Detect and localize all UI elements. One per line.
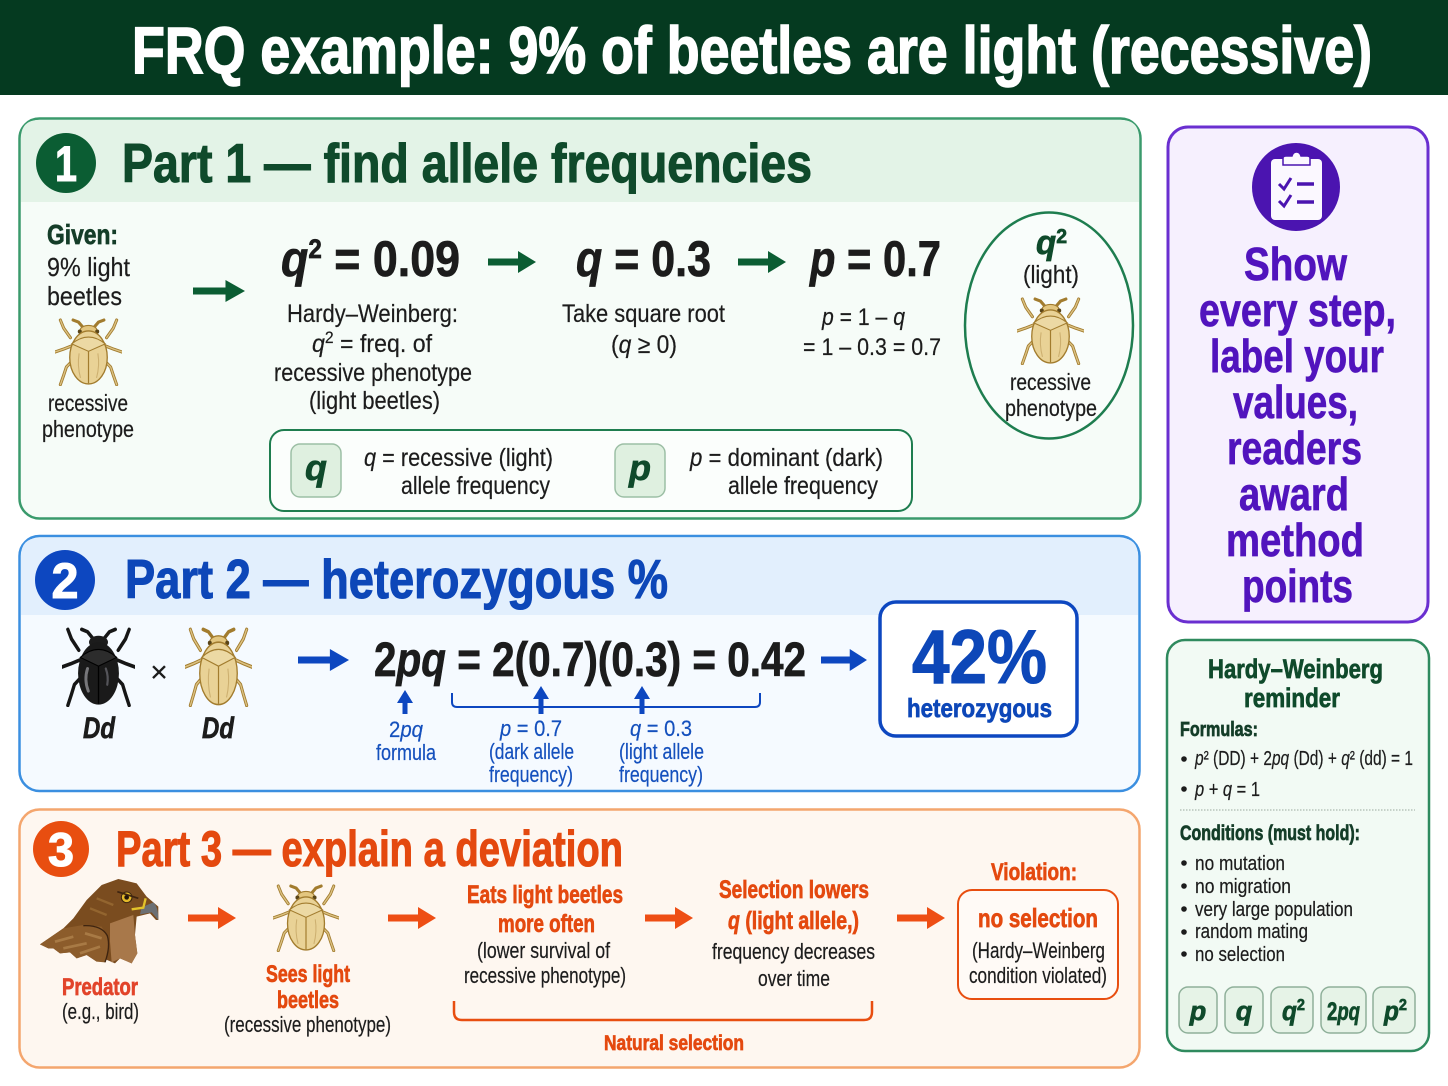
text: formulas: Formulas: [1180,719,1258,741]
text: q definition [364,444,553,500]
label: Dd light parent: Dd [202,712,235,745]
text: selection lowers q: over time [758,966,830,991]
arrow: q to p [738,251,786,273]
annotation: q value: frequency) [619,762,703,787]
annotation: p value [489,716,574,787]
tiles: symbols: 2 [1399,997,1407,1014]
text: show every step: method [1226,514,1364,566]
text: eats light beetles: Eats light beetles [467,881,623,909]
arrow: selection to violation [897,907,945,929]
key tile: q [291,444,341,497]
text: show every step: Show [1244,238,1347,290]
text: selection lowers q: Selection lowers [719,876,869,904]
annotation: q value: q = 0.3 [630,716,692,741]
text: show every step: points [1242,560,1353,612]
text: predator: Predator [62,974,138,1001]
callout: q squared light phenotype: phenotype [1005,395,1097,421]
text: sees light beetles [224,961,391,1037]
arrow: beetle to eats [388,907,436,929]
text: p derivation [803,304,941,361]
text: selection lowers q: frequency decreases [712,939,875,964]
callout: 42 percent heterozygous: heterozygous [907,693,1052,723]
text: recessive phenotype: recessive [48,390,128,416]
callout: no selection: condition violated) [969,963,1107,988]
text: take square root: (q ≥ 0) [611,331,677,359]
text: sees light beetles: Sees light [266,961,350,988]
callout: q squared light phenotype: 2 [1056,226,1067,248]
text: recessive phenotype [42,390,134,442]
text: eats light beetles: more often [498,910,595,938]
tiles: symbols: 2pq [1327,998,1360,1026]
annotation: 2pq formula: formula [376,740,437,765]
equation: q squared: 2 [308,234,322,264]
annotation: p value: (dark allele [489,739,574,764]
arrow: q squared to q [488,251,536,273]
text: eats light beetles: recessive phenotype) [464,963,626,988]
text: take square root [562,300,725,359]
text: formulas: p² (DD) + 2pq (Dd) + q² (dd) = 1 [1194,748,1413,770]
arrow: predator to beetle [188,907,236,929]
text: conditions: no selection [1195,944,1285,966]
symbol: cross: × [150,656,168,689]
icon: hawk [40,879,158,963]
text: show every step: values, [1233,376,1358,428]
callout: no selection [958,890,1118,999]
text: conditions: no migration [1195,876,1291,898]
equation: q: q = 0.3 [576,231,711,287]
text: conditions: Conditions (must hold): [1180,822,1360,845]
text: sees light beetles: beetles [277,987,339,1014]
callout: q squared light phenotype [965,212,1133,438]
icon: light beetle [55,320,122,385]
key tile: p: p [628,447,651,488]
text: p derivation: = 1 – 0.3 = 0.7 [803,334,941,361]
text: hardy-weinberg note: (light beetles) [309,387,440,415]
text: p derivation: p = 1 – q [821,304,906,331]
panel: part 2 heterozygous percent [20,536,1140,791]
text: selection lowers q [712,876,875,991]
callout: 42 percent heterozygous [880,602,1077,736]
text: show every step: every step, [1199,284,1396,336]
badge: step 2: 2 [52,553,78,609]
text: sees light beetles: (recessive phenotype) [224,1012,391,1037]
text: conditions: very large population [1195,899,1353,921]
arrow: given to q squared [193,280,245,302]
annotation: q value [619,716,704,787]
badge: step 3: 3 [48,823,74,876]
callout: no selection: no selection [978,903,1098,933]
badge: step 1 [36,133,96,193]
text: show every step: readers [1227,422,1362,474]
text: eats light beetles: (lower survival of [477,938,611,963]
tiles: symbols: 2 [1297,997,1305,1014]
text: q definition: allele frequency [401,472,550,500]
annotation: p value: frequency) [489,762,573,787]
badge: step 1: 1 [55,136,77,192]
text: formulas: p + q = 1 [1194,779,1260,801]
key tile: q: q [305,447,327,488]
icon: clipboard checklist [1252,143,1340,231]
arrow: eats to selection [645,907,693,929]
text: recessive phenotype: phenotype [42,416,134,442]
text: given: beetles [47,281,122,311]
arrow: equation to result [821,649,867,671]
tiles: symbols: p [1383,996,1399,1026]
icon: light beetle [185,629,252,705]
icon: dark beetle [62,629,135,705]
text: eats light beetles [464,881,626,988]
tiles: symbols: p [1189,996,1206,1026]
text: selection lowers q: q (light allele,) [728,907,859,935]
text: hardy-weinberg note: 2 [325,328,334,347]
label: Dd dark parent: Dd [83,712,116,745]
tiles: symbols [1179,987,1415,1033]
text: predator: (e.g., bird) [62,999,139,1024]
callout: q squared light phenotype: (light) [1023,261,1079,289]
heading: part 2: Part 2 — heterozygous % [125,548,668,610]
text: predator [62,974,139,1024]
panel: part 3 explain a deviation [20,810,1140,1068]
panel: hardy-weinberg reminder [1167,640,1429,1051]
text: hardy-weinberg note: recessive phenotype [274,359,472,387]
text: given [47,219,131,311]
heading: part 1: Part 1 — find allele frequencies [122,132,812,194]
badge: step 2 [35,550,95,610]
callout: 42 percent heterozygous: 42% [912,615,1047,700]
text: show every step [1199,238,1396,612]
callout: q squared light phenotype: q [1036,224,1056,262]
text: given: Given: [47,219,118,250]
tiles: symbols: q [1236,996,1253,1026]
text: hardy-weinberg note: q [312,330,325,358]
text: conditions: random mating [1195,921,1308,943]
equation: q squared: q [281,231,308,287]
text: show every step: label your [1210,330,1384,382]
equation: q squared: = 0.09 [322,231,460,287]
tiles: symbols: q [1282,996,1297,1026]
text: conditions [1180,822,1360,966]
text: p definition: p = dominant (dark) [689,444,883,472]
badge: step 3 [33,821,89,877]
icon: light beetle [273,886,339,951]
text: conditions: no mutation [1195,853,1285,875]
label: violation: Violation: [991,859,1077,886]
legend: q and p definitions [270,430,912,511]
heading: reminder [1208,654,1383,713]
text: given: 9% light [47,252,131,282]
text: p definition: allele frequency [728,472,878,500]
bracket: natural selection: Natural selection [604,1032,744,1055]
heading: part 3: Part 3 — explain a deviation [116,821,623,877]
heading: reminder: Hardy–Weinberg [1208,654,1383,684]
heading: reminder: reminder [1244,683,1340,713]
text: p definition [689,444,883,500]
text: q definition: q = recessive (light) [364,444,553,472]
icon: light beetle [1017,299,1084,364]
equation: 2pq: 2pq = 2(0.7)(0.3) = 0.42 [374,634,806,687]
annotation: q value: (light allele [619,739,704,764]
text: hardy-weinberg note: = freq. of [334,330,432,358]
callout: q squared light phenotype: recessive [1010,369,1091,395]
text: formulas [1180,719,1413,801]
text: take square root: Take square root [562,300,725,328]
arrow: cross to equation [298,649,349,671]
panel: show every step tip [1168,127,1428,622]
callout: no selection: (Hardy–Weinberg [972,938,1105,963]
annotation: 2pq formula: 2pq [389,717,424,742]
panel: part 1 find allele frequencies [20,118,1140,518]
bracket: natural selection [454,1001,872,1055]
annotation: 2pq formula [376,690,437,765]
text: show every step: award [1239,468,1349,520]
text: hardy-weinberg note [274,300,472,415]
bracket: values [452,686,760,714]
key tile: p [615,444,665,497]
equation: p: p = 0.7 [808,231,941,287]
text: hardy-weinberg note: Hardy–Weinberg: [287,300,458,328]
annotation: p value: p = 0.7 [499,716,562,741]
